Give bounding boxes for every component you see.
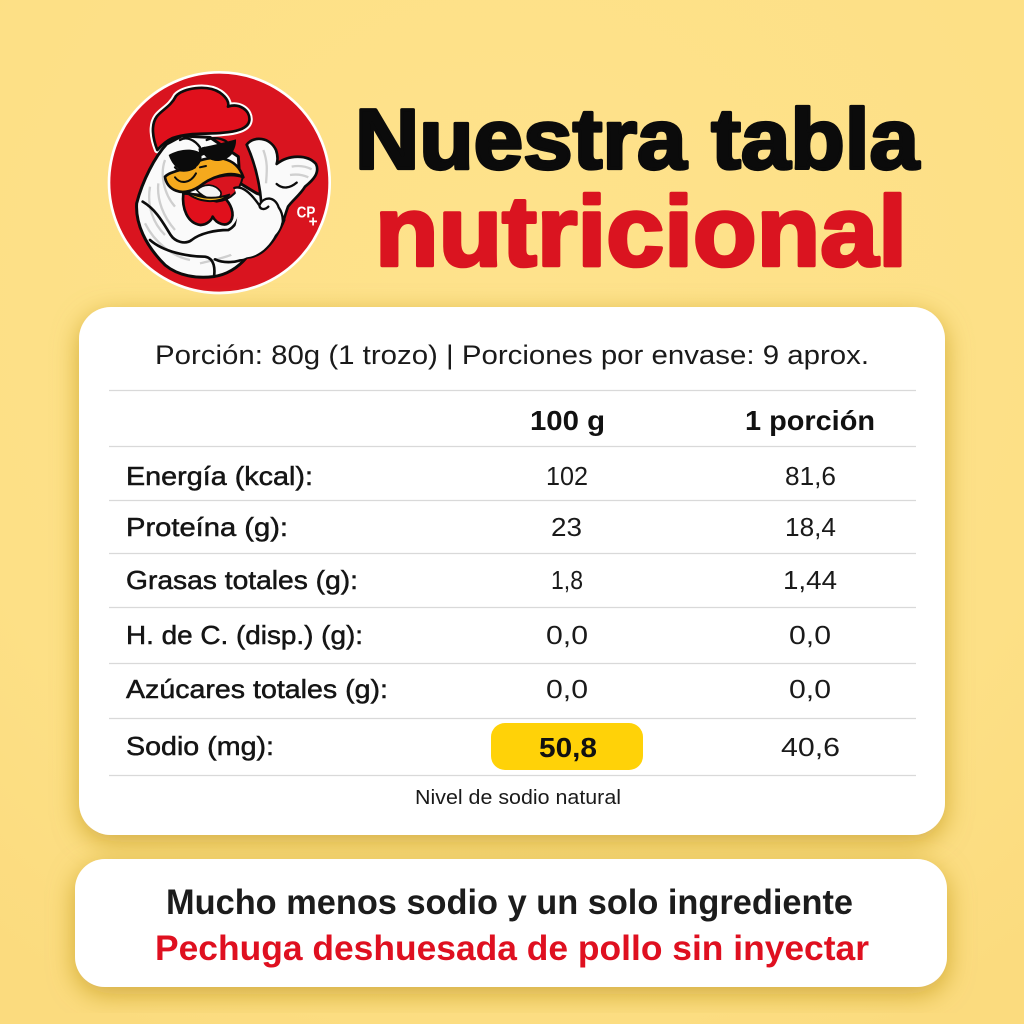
row: sugars: Azúcares totales (g): <box>126 674 388 704</box>
row: energy <box>126 461 836 491</box>
title line 1: Nuestra tabla <box>355 92 920 188</box>
logo: rooster mascot badge <box>109 72 330 293</box>
row: sodium: 40,6 <box>781 732 840 762</box>
row: carbohydrates: H. de C. (disp.) (g): <box>126 620 363 650</box>
icon: rooster wattle <box>183 193 233 225</box>
column headers: 1 porción <box>745 405 875 436</box>
row: protein: 23 <box>551 512 582 542</box>
icon: eye frames <box>175 138 231 171</box>
icon: thumbs-up hand <box>247 139 317 225</box>
row: carbohydrates <box>126 620 831 650</box>
row: energy: Energía (kcal): <box>126 461 313 491</box>
icon: rooster comb <box>153 88 249 150</box>
row: carbohydrates: 0,0 <box>789 620 831 650</box>
row: sodium: 50,8 <box>539 732 597 763</box>
icon: tongue <box>197 185 221 199</box>
row: sugars: 0,0 <box>789 674 831 704</box>
icon: sunglasses <box>169 139 236 171</box>
badge circle <box>109 72 330 293</box>
row: protein: 18,4 <box>785 512 836 542</box>
icon: open mouth <box>198 175 243 202</box>
sodium note: Nivel de sodio natural <box>415 787 621 809</box>
icon: fist <box>229 187 282 259</box>
row: fat: 1,8 <box>551 565 583 595</box>
row: energy: 81,6 <box>785 461 836 491</box>
callout card <box>75 859 947 987</box>
icon: neck and wing feather lines <box>143 202 247 277</box>
row: protein: Proteína (g): <box>126 512 288 542</box>
icon: rooster body <box>137 136 284 277</box>
brand plus sign: + <box>309 214 318 231</box>
row: fat <box>126 565 837 595</box>
row: protein <box>126 512 836 542</box>
icon: finger lines <box>234 183 297 223</box>
icon: smile and nostril <box>175 166 206 182</box>
column headers: 100 g <box>530 405 605 436</box>
row: sodium <box>126 723 840 770</box>
icon: feather shading <box>145 160 277 263</box>
column headers <box>530 405 875 436</box>
icon: lower beak <box>183 189 229 201</box>
row: energy: 102 <box>546 461 588 491</box>
title <box>355 92 920 286</box>
title line 2: nutricional <box>375 176 907 286</box>
panel: nutrition table <box>79 307 945 835</box>
panel: bottom callout <box>75 859 947 987</box>
portion text: Porción: 80g (1 trozo) | Porciones por envase: 9 aprox. <box>155 340 869 370</box>
icon: thumb shading <box>263 150 312 183</box>
table card <box>79 307 945 835</box>
brand mark: CP <box>297 204 316 221</box>
row: sodium: Sodio (mg): <box>126 731 274 761</box>
sodium highlight <box>491 723 643 770</box>
callout line 2: Pechuga deshuesada de pollo sin inyectar <box>155 929 869 968</box>
row: fat: 1,44 <box>783 565 837 595</box>
row: sugars <box>126 674 831 704</box>
row: fat: Grasas totales (g): <box>126 565 358 595</box>
row: carbohydrates: 0,0 <box>546 620 588 650</box>
row: sugars: 0,0 <box>546 674 588 704</box>
icon: upper beak <box>165 158 243 192</box>
callout line 1: Mucho menos sodio y un solo ingrediente <box>166 883 853 922</box>
